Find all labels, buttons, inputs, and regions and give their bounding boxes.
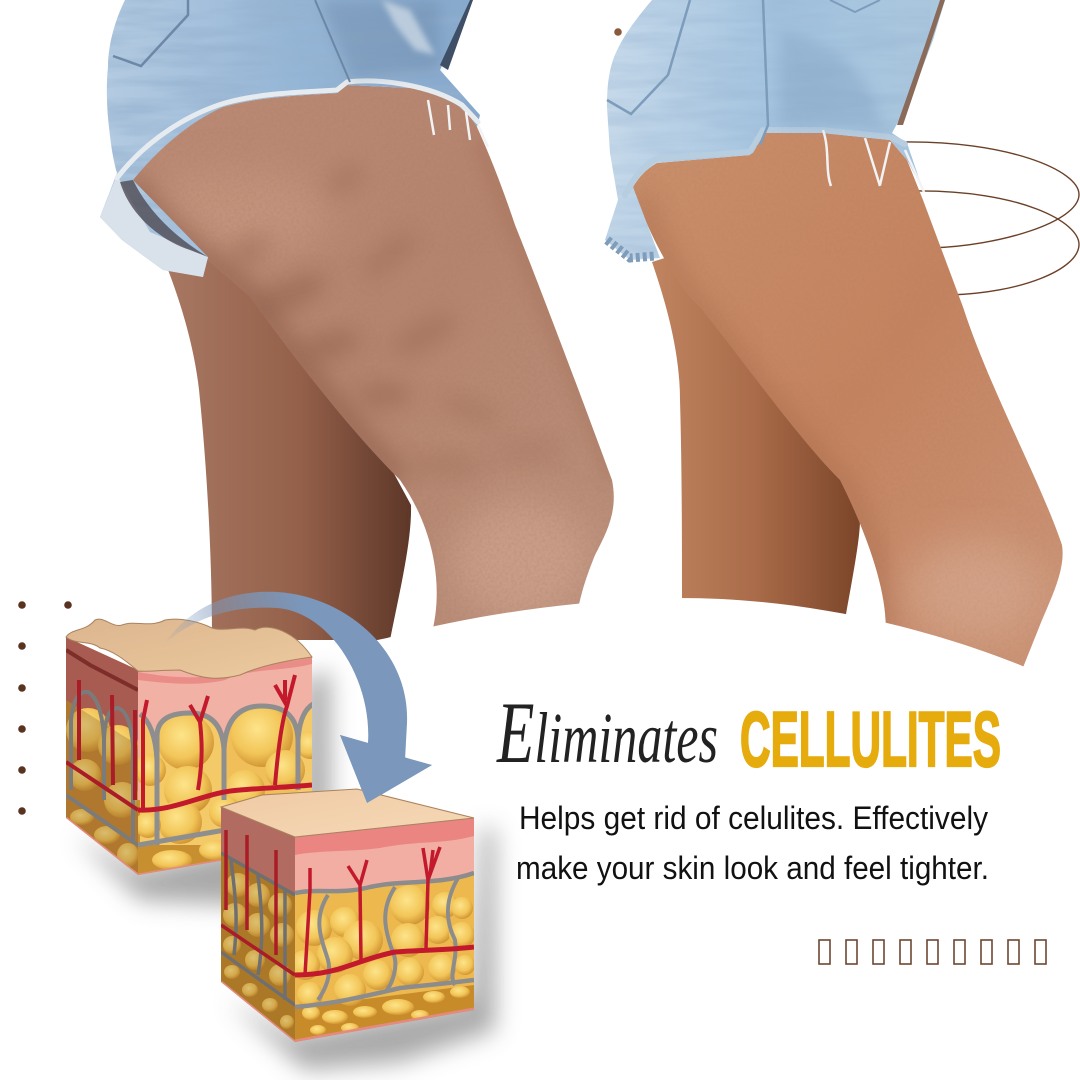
denim shorts bbox=[100, 0, 480, 277]
back leg bbox=[652, 250, 860, 620]
pocket and seams bbox=[607, 0, 690, 114]
cube shadow bbox=[228, 826, 495, 1070]
back leg bbox=[165, 250, 411, 640]
blue arrow tip over the smooth cube bbox=[340, 735, 432, 803]
left face bbox=[221, 808, 295, 1042]
left face bbox=[66, 638, 138, 875]
row of placeholder glyph boxes bbox=[819, 940, 1046, 964]
front face bbox=[138, 658, 312, 875]
front face bbox=[290, 815, 475, 1045]
flat top bbox=[221, 789, 474, 837]
dot column bbox=[18, 601, 72, 815]
heading bbox=[496, 685, 1001, 783]
description text: make your skin look and feel tighter. bbox=[516, 850, 989, 886]
white curved panel bbox=[0, 598, 1080, 1080]
bumpy top bbox=[66, 619, 312, 678]
thigh shading and knee highlight bbox=[636, 190, 1052, 642]
skin diagram: cellulite cube bbox=[60, 619, 330, 905]
pocket and seams bbox=[113, 0, 188, 66]
photo: left leg with cellulite bbox=[95, 0, 620, 640]
front thigh bbox=[133, 85, 614, 640]
front thigh bbox=[633, 133, 1063, 675]
denim shadow under hem bbox=[120, 180, 208, 257]
description text bbox=[516, 800, 989, 886]
frayed lower corner bbox=[100, 175, 208, 277]
decorative curved lines behind right leg bbox=[900, 142, 1079, 295]
top accent dot bbox=[614, 28, 622, 36]
denim shorts bbox=[605, 0, 945, 260]
skin diagram: smooth cube bbox=[215, 789, 495, 1070]
photo: right leg after treatment bbox=[600, 0, 1070, 675]
frayed hem bbox=[625, 130, 907, 195]
cellulite dimples and shading bbox=[134, 140, 612, 613]
denim wash texture bbox=[95, 0, 485, 280]
denim wash texture bbox=[605, 12, 918, 253]
blue curved arrow bbox=[165, 592, 432, 803]
cube shadow bbox=[75, 670, 330, 905]
frayed hem bbox=[117, 81, 478, 178]
description text: Helps get rid of celulites. Effectively bbox=[519, 800, 988, 836]
script word: Eliminates bbox=[496, 685, 718, 782]
